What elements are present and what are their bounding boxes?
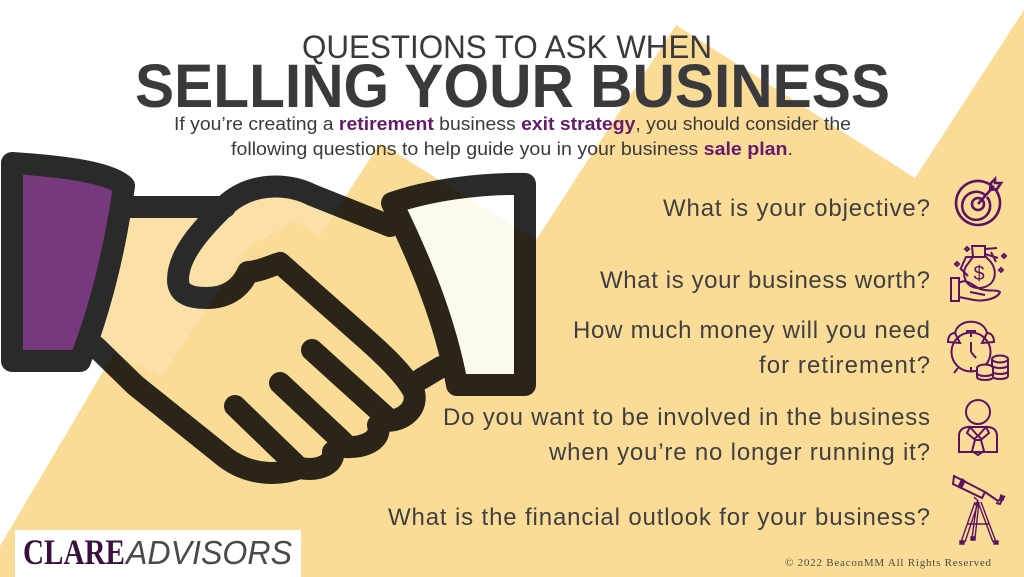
copyright: © 2022 BeaconMM All Rights Reserved xyxy=(785,557,992,569)
logo: CLARE xyxy=(23,532,125,572)
hand fill xyxy=(96,186,441,474)
icon: money bag in hand: $ xyxy=(973,263,985,285)
icon: alarm clock and coins xyxy=(948,322,1008,380)
intro text: following questions to help guide you in your business sale plan . xyxy=(231,139,793,159)
intro text xyxy=(174,114,851,159)
logo xyxy=(15,530,301,577)
questions: What is the financial outlook for your business? xyxy=(388,504,930,531)
logo: ADVISORS xyxy=(124,534,292,571)
title: SELLING YOUR BUSINESS xyxy=(135,52,890,120)
handshake illustration xyxy=(12,163,525,474)
questions: What is your objective? xyxy=(663,195,930,222)
title: QUESTIONS TO ASK WHEN xyxy=(302,29,712,65)
questions: What is your business worth? xyxy=(600,267,930,294)
questions xyxy=(388,195,930,531)
questions: when you’re no longer running it? xyxy=(548,439,930,466)
right cuff xyxy=(392,184,525,385)
icon: person with tie xyxy=(959,400,997,455)
left cuff xyxy=(12,163,124,361)
icon: telescope xyxy=(953,476,1005,544)
questions: for retirement? xyxy=(759,352,930,379)
icon: target xyxy=(956,179,1001,225)
questions: Do you want to be involved in the business xyxy=(443,404,930,431)
icon: money bag in hand xyxy=(951,246,1006,301)
questions: How much money will you need xyxy=(573,317,930,344)
hand outlines xyxy=(96,187,441,473)
intro text: If you’re creating a retirement business exit strategy , you should consider the xyxy=(174,114,851,134)
